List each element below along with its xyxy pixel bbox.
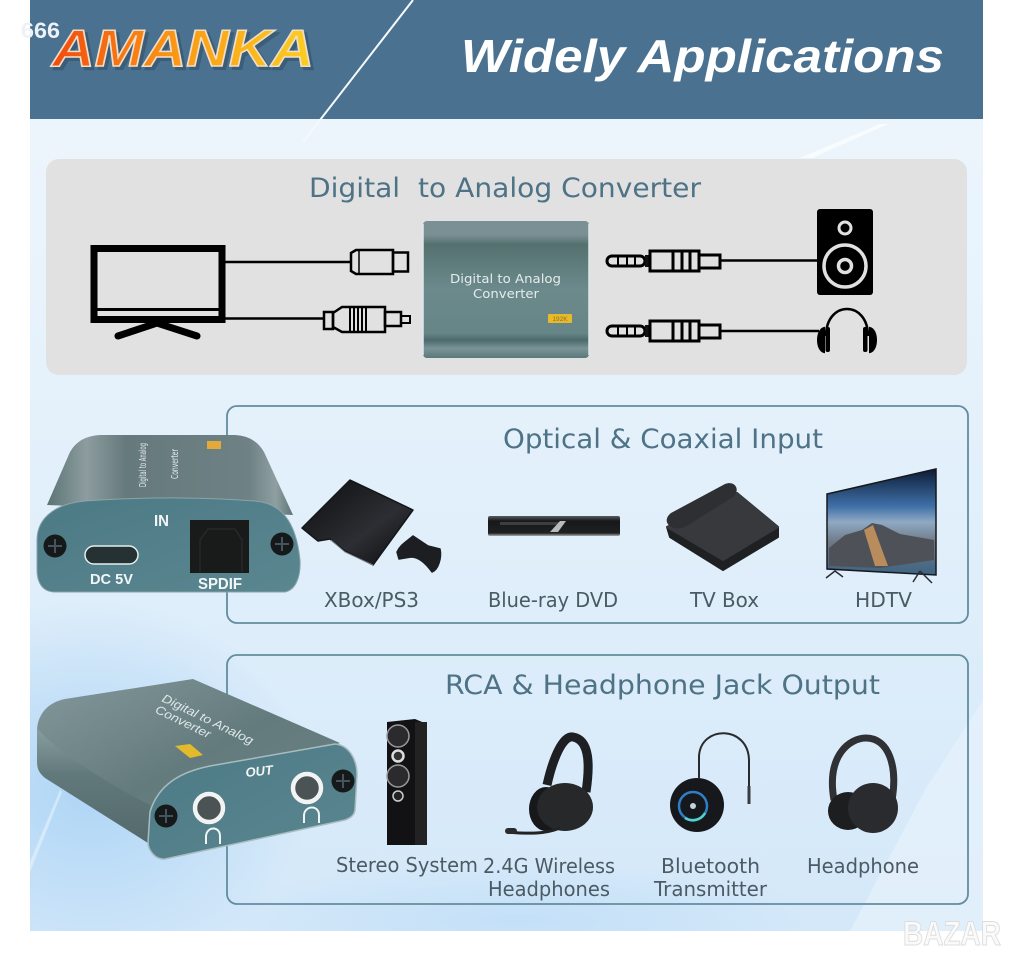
- headphone glyphs: [206, 808, 319, 844]
- SPDIF port: [190, 520, 249, 573]
- converter device: Converter: [473, 286, 540, 301]
- jack to speaker: [607, 251, 817, 271]
- screws: [154, 804, 178, 828]
- label: 2.4G Wireless: [483, 854, 615, 878]
- top label: [138, 443, 181, 487]
- converter device: 192K: [552, 316, 568, 323]
- output side device: [37, 679, 357, 859]
- USB-C port: [85, 546, 138, 564]
- header band: [30, 0, 983, 142]
- title: Widely Applications: [461, 30, 944, 82]
- HDTV: [826, 469, 936, 612]
- icon: speaker: [817, 209, 873, 295]
- device front face: [148, 744, 357, 859]
- port labels: IN: [154, 513, 169, 530]
- label: Headphones: [488, 877, 610, 901]
- TV box and remote: [667, 483, 778, 612]
- label: [653, 854, 768, 901]
- cable: lower input: [225, 307, 410, 332]
- label: Stereo System: [336, 853, 478, 877]
- jack to headphones: [607, 321, 819, 341]
- label: XBox/PS3: [324, 588, 419, 612]
- device body: [37, 679, 340, 843]
- label: [483, 854, 615, 901]
- label: Bluetooth: [661, 854, 760, 878]
- stereo speaker: [336, 719, 478, 877]
- OUT label: OUT: [245, 762, 275, 780]
- label: Transmitter: [653, 877, 768, 901]
- screws: [44, 534, 66, 558]
- logo: AMANKA: AMANKA: [53, 23, 317, 81]
- input side device: [37, 435, 300, 593]
- icon: headphones: [818, 309, 876, 352]
- converter device: [423, 221, 589, 358]
- top label: Digital to Analog: [138, 443, 149, 487]
- top label: Converter: [170, 449, 181, 479]
- Blue-ray DVD player: [488, 516, 620, 612]
- panel: optical and coaxial input: [227, 406, 968, 623]
- label: Blue-ray DVD: [488, 588, 618, 612]
- logo: AMANKA: AMANKA: [50, 20, 314, 78]
- heading: digital to analog converter: Digital to Analog Converter: [309, 173, 702, 204]
- icon: television: [94, 248, 222, 336]
- port labels: SPDIF: [198, 576, 242, 593]
- watermark number: 666: [21, 18, 60, 43]
- heading: optical & coaxial input: Optical & Coaxial Input: [503, 424, 823, 455]
- converter device: Digital to Analog: [450, 271, 561, 286]
- bluetooth transmitter: [653, 733, 768, 901]
- diagonal line: [303, 0, 413, 142]
- heading: RCA & headphone jack output: RCA & Headphone Jack Output: [445, 670, 880, 701]
- label: HDTV: [855, 588, 912, 612]
- top label: [153, 691, 256, 759]
- headphone: [807, 738, 919, 878]
- port labels: DC 5V: [90, 571, 133, 588]
- device body: [47, 435, 293, 515]
- panel: RCA and headphone jack output: [227, 655, 968, 904]
- audio jacks: [195, 794, 223, 822]
- XBox/PS3 console: [302, 480, 441, 612]
- top label: Digital to Analog: [160, 691, 256, 748]
- label: Headphone: [807, 854, 919, 878]
- label: TV Box: [689, 588, 759, 612]
- wireless headset: [483, 737, 615, 901]
- cable: upper input: [225, 250, 408, 274]
- background card: [30, 119, 983, 931]
- panel: converter diagram: [46, 159, 967, 375]
- top label: Converter: [153, 702, 214, 742]
- port labels: [90, 513, 242, 593]
